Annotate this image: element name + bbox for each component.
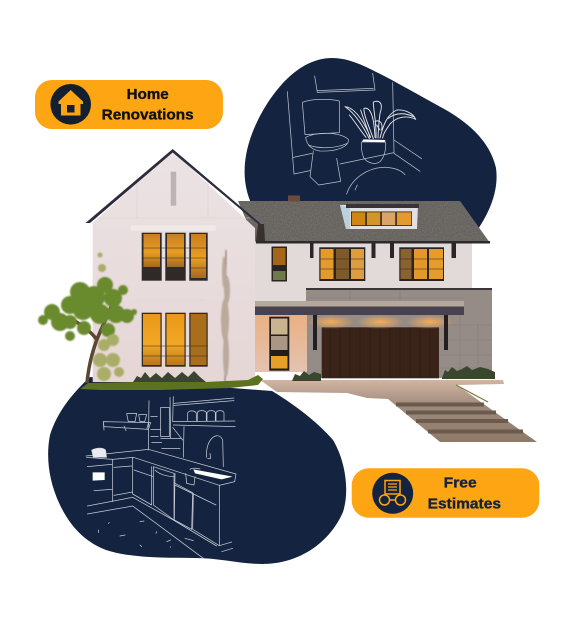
window ledge xyxy=(131,225,216,231)
lawn strip xyxy=(80,375,263,390)
line art: bathroom sketch xyxy=(287,73,422,194)
badge label line 2: Renovations xyxy=(102,108,194,124)
gable wall shading lines xyxy=(92,175,250,300)
planting under windows xyxy=(133,371,206,382)
badge: free estimates xyxy=(352,468,539,518)
stone wall xyxy=(306,288,492,378)
driveway xyxy=(260,380,537,442)
badge label: Home xyxy=(127,87,169,103)
main roof xyxy=(238,201,490,243)
lower gable windows xyxy=(142,313,208,367)
blob: kitchen background xyxy=(48,377,346,564)
left gable wall xyxy=(93,151,255,382)
dormer xyxy=(340,204,419,229)
roof brackets xyxy=(310,243,456,258)
blob: bathroom background xyxy=(245,58,497,232)
badge: home renovations xyxy=(35,80,223,129)
gable end dark return xyxy=(256,224,265,241)
entry canopy xyxy=(254,301,464,350)
garage door xyxy=(322,327,439,378)
upper gable windows xyxy=(142,233,208,281)
house photo illustration xyxy=(38,149,537,442)
shrubs by garage xyxy=(292,366,495,381)
upper windows right wing xyxy=(272,246,444,282)
badge label: Free xyxy=(444,476,477,492)
chimney xyxy=(288,196,300,202)
slender tree xyxy=(221,250,230,382)
line art: kitchen sketch xyxy=(86,397,236,558)
infographic canvas xyxy=(35,58,540,564)
badge label line 2: Estimates xyxy=(428,497,501,513)
icon: document with coins xyxy=(372,473,413,514)
green leafy tree xyxy=(38,252,137,383)
garage lights xyxy=(307,315,454,329)
gable roof edge xyxy=(86,149,261,226)
front door xyxy=(269,317,289,371)
entry wall xyxy=(255,315,307,372)
upper wall right wing xyxy=(255,243,472,301)
gable slit xyxy=(171,172,176,206)
icon: house xyxy=(50,84,91,125)
